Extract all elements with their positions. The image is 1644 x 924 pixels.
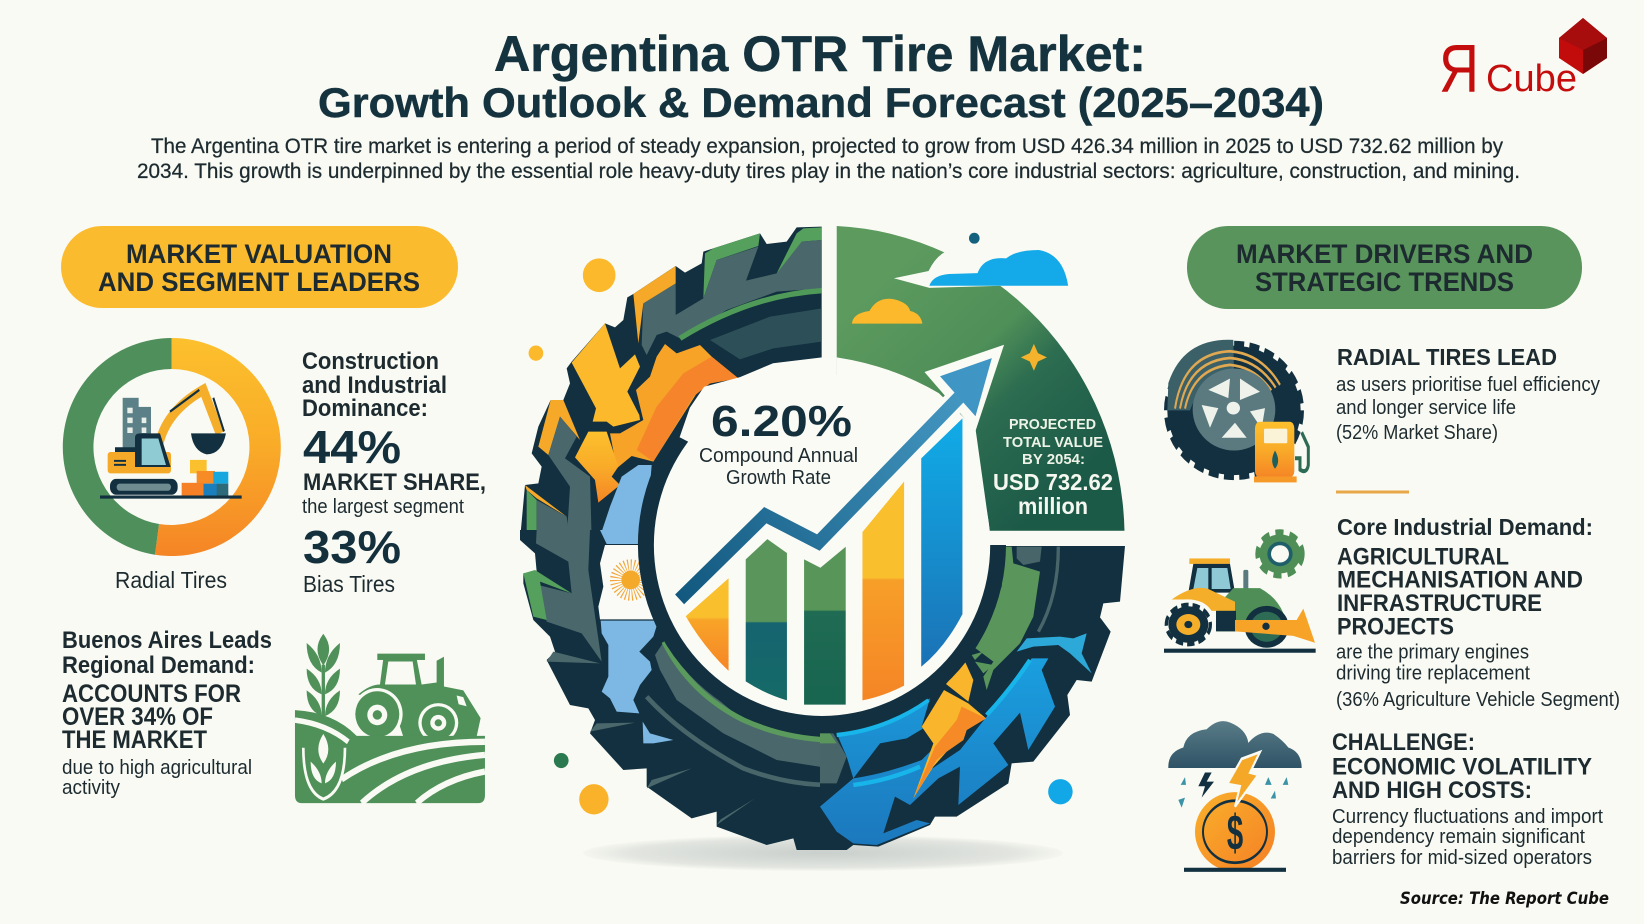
- icon: tractor and field: [295, 634, 485, 803]
- text block: challenge: AND HIGH COSTS:: [1332, 777, 1532, 804]
- logo: RCube: Cube: [1486, 58, 1577, 100]
- text block: core industrial demand: MECHANISATION AND: [1337, 566, 1583, 594]
- title: Argentina OTR Tire Market:: [494, 26, 1146, 82]
- text block: buenos aires: OVER 34% OF: [62, 703, 213, 731]
- text block: construction dominance: Construction: [302, 348, 439, 375]
- text block: buenos aires: Regional Demand:: [62, 652, 255, 679]
- text block: radial tires lead: RADIAL TIRES LEAD: [1337, 344, 1557, 370]
- title: Growth Outlook & Demand Forecast (2025–2034): [318, 79, 1324, 126]
- title: [318, 26, 1324, 126]
- logo: RCube: [1439, 18, 1607, 107]
- text block: construction dominance: 33%: [303, 521, 401, 573]
- intro paragraph: [137, 134, 1520, 183]
- text block: buenos aires: THE MARKET: [62, 726, 207, 754]
- callout: cagr: 6.20%: [711, 397, 852, 446]
- text block: core industrial demand: INFRASTRUCTURE: [1337, 590, 1542, 617]
- heading pill: market valuation: [61, 226, 458, 308]
- text block: challenge: Currency fluctuations and import: [1332, 806, 1603, 828]
- callout: projected value: TOTAL VALUE: [1003, 434, 1103, 451]
- icon: excavator: [100, 390, 242, 499]
- intro paragraph: The Argentina OTR tire market is entering a period of steady expansion, projected to grow from USD 426.34 million in 2025 to USD 732.62 million by: [151, 134, 1503, 158]
- text block: construction dominance: the largest segment: [302, 496, 464, 518]
- text block: core industrial demand: driving tire replacement: [1336, 662, 1530, 684]
- text block: radial tires lead: [1336, 344, 1601, 444]
- icon: tire and fuel pump: [1166, 340, 1308, 482]
- text block: challenge: [1332, 729, 1603, 869]
- growth arrow: [680, 345, 1004, 599]
- intro paragraph: 2034. This growth is underpinned by the essential role heavy-duty tires play in the nation’s core industrial sectors: agriculture, construction, and mining.: [137, 159, 1520, 183]
- text block: construction dominance: and Industrial: [302, 372, 447, 399]
- heading pill: market valuation: MARKET VALUATION: [126, 239, 392, 269]
- text block: radial tires lead: (52% Market Share): [1336, 421, 1498, 444]
- source note: Source: The Report Cube: [1400, 889, 1609, 908]
- text block: radial tires lead: as users prioritise fuel efficiency: [1336, 373, 1601, 396]
- text block: core industrial demand: Core Industrial Demand:: [1337, 514, 1593, 540]
- icon: tractor with gear: [1164, 533, 1316, 653]
- tire ground shadow: [583, 835, 1063, 871]
- decorative dots: [529, 233, 1073, 814]
- upper right segments in shared coordinates: [529, 226, 1124, 814]
- panel: market drivers: [1164, 226, 1620, 872]
- hub ring: [646, 429, 998, 724]
- text block: core industrial demand: PROJECTS: [1337, 614, 1454, 640]
- heading pill: market drivers: STRATEGIC TRENDS: [1255, 267, 1514, 297]
- panel: market valuation: [61, 226, 486, 803]
- callout: projected value: [993, 416, 1113, 519]
- upper right growth sector: [837, 226, 1124, 531]
- text block: construction dominance: MARKET SHARE,: [303, 469, 486, 496]
- heading pill: market drivers: [1187, 226, 1582, 309]
- text block: core industrial demand: [1336, 514, 1620, 711]
- text block: buenos aires: [62, 627, 272, 799]
- label: radial tires: Radial Tires: [115, 567, 227, 593]
- text block: construction dominance: Bias Tires: [303, 571, 395, 597]
- callout: cagr: Compound Annual: [699, 445, 858, 467]
- heading pill: market valuation: AND SEGMENT LEADERS: [98, 267, 420, 297]
- text block: buenos aires: activity: [62, 777, 120, 799]
- text block: construction dominance: 44%: [303, 421, 401, 473]
- text block: challenge: CHALLENGE:: [1332, 729, 1475, 756]
- icon: storm and coin: $: [1227, 805, 1243, 861]
- callout: cagr: [699, 397, 858, 489]
- tire quadrant: lower right blue tread: [820, 546, 1125, 850]
- icon: storm and coin: [1168, 721, 1302, 872]
- text block: core industrial demand: AGRICULTURAL: [1337, 544, 1509, 570]
- text block: challenge: barriers for mid-sized operators: [1332, 847, 1592, 869]
- logo: RCube: Я: [1439, 31, 1479, 107]
- bar chart: [686, 418, 962, 705]
- callout: projected value: BY 2054:: [1022, 451, 1085, 468]
- text block: radial tires lead: and longer service life: [1336, 396, 1516, 419]
- heading pill: market drivers: MARKET DRIVERS AND: [1236, 239, 1533, 269]
- callout: projected value: million: [1018, 493, 1088, 519]
- text block: construction dominance: Dominance:: [302, 395, 428, 422]
- text block: construction dominance: [302, 348, 486, 597]
- white hub: [654, 357, 990, 716]
- text block: challenge: dependency remain significant: [1332, 826, 1585, 848]
- callout: projected value: PROJECTED: [1009, 416, 1096, 433]
- tire quadrant: lower left tread and flag: [520, 530, 830, 850]
- text block: buenos aires: ACCOUNTS FOR: [62, 680, 241, 708]
- text block: challenge: ECONOMIC VOLATILITY: [1332, 754, 1592, 780]
- icon: clouds and star: [852, 250, 1068, 371]
- callout: projected value: USD 732.62: [993, 469, 1113, 495]
- text block: buenos aires: due to high agricultural: [62, 757, 252, 779]
- donut chart: radial tires: [63, 338, 281, 556]
- text block: core industrial demand: are the primary engines: [1336, 642, 1529, 664]
- tire quadrant: upper left tread and map: [520, 227, 822, 540]
- central tire graphic: [520, 226, 1125, 871]
- text block: buenos aires: Buenos Aires Leads: [62, 627, 272, 654]
- callout: cagr: Growth Rate: [726, 467, 831, 489]
- text block: core industrial demand: (36% Agriculture Vehicle Segment): [1336, 688, 1620, 711]
